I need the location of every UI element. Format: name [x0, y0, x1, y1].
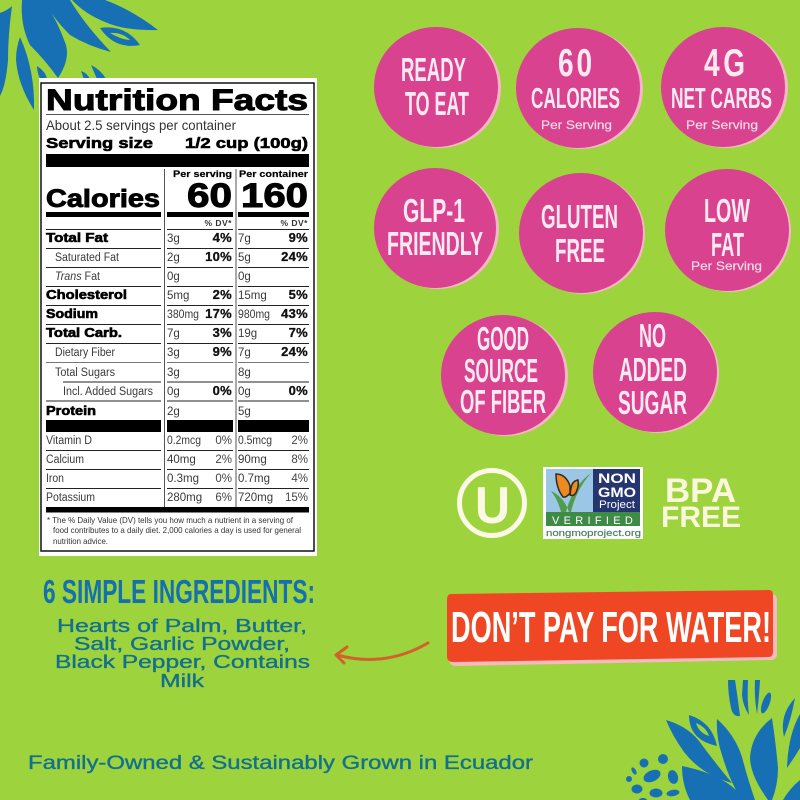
nutrient labels: Total Sugars [55, 367, 115, 379]
per serving column values [167, 230, 232, 504]
per serving column values: 0% [215, 473, 232, 485]
per container column values: 980mg [238, 309, 270, 321]
per serving column values: 0% [213, 383, 232, 398]
per container column values: 5% [289, 287, 308, 302]
per serving column values: 5mg [167, 290, 189, 302]
per serving column values: 3g [167, 347, 180, 359]
footer tagline: Family-Owned & Sustainably Grown in Ecuador [28, 753, 534, 774]
badge: no added sugar: SUGAR [618, 384, 687, 421]
heading: nutrition facts: Nutrition Facts [46, 84, 308, 117]
heading: ingredients: 6 SIMPLE INGREDIENTS: [43, 573, 315, 610]
badge: gluten free: FREE [555, 232, 605, 269]
arrow: banner to ingredients [336, 643, 428, 663]
per container column values: 15mg [238, 290, 267, 302]
calories section: Calories [46, 185, 160, 213]
per serving column values: 2% [213, 287, 232, 302]
icon: bpa free: BPA [665, 472, 736, 510]
nutrient labels: Total Fat [46, 231, 109, 245]
nutrient labels: Calcium [46, 454, 84, 466]
ingredients list [55, 616, 310, 691]
badge: gluten free [519, 173, 645, 294]
per container column values: 9% [289, 230, 308, 245]
nutrient labels: Incl. Added Sugars [63, 386, 153, 398]
per serving column values: 17% [205, 306, 232, 321]
nutrient labels: Cholesterol [46, 288, 127, 302]
per container column values: 24% [281, 344, 308, 359]
per container column values: 8g [238, 367, 251, 379]
footnote: food contributes to a daily diet. 2,000 calories a day is used for general [53, 525, 301, 535]
servings info [46, 114, 309, 167]
servings info: 1/2 cup (100g) [185, 135, 308, 152]
per container column values: 4% [291, 473, 308, 485]
icon: bpa free: FREE [661, 501, 741, 534]
badge: 4g net carbs: 4G [704, 42, 749, 85]
badge: good source of fiber [441, 315, 568, 436]
nutrient labels: Sodium [46, 307, 98, 321]
panel: nutrition facts label [39, 78, 317, 556]
per serving column values: 2g [167, 406, 180, 418]
per serving column values: 7g [167, 328, 180, 340]
footnote: nutrition advice. [53, 536, 108, 546]
per serving column values: 10% [205, 249, 232, 264]
leaf decoration: bottom right [626, 680, 800, 800]
nutrient labels: Saturated Fat [55, 252, 120, 264]
nutrient labels: Potassium [46, 492, 95, 504]
per serving column values: 0% [215, 435, 232, 447]
icon: bpa free [661, 472, 741, 534]
badge: no added sugar: NO [639, 317, 666, 354]
badge: no added sugar [593, 312, 719, 433]
nutrient labels: Total Carb. [46, 326, 122, 340]
icon: non-gmo project verified: Project [599, 499, 635, 511]
footnote: * The % Daily Value (DV) tells you how much a nutrient in a serving of [47, 515, 294, 525]
per serving column values: 9% [213, 344, 232, 359]
calories section: % DV* [280, 218, 308, 228]
calories section [46, 169, 309, 507]
per serving column values: 0g [167, 271, 180, 283]
badge: glp-1 friendly: FRIENDLY [387, 225, 483, 262]
nutrient labels: Vitamin D [46, 435, 92, 447]
badge: good source of fiber: SOURCE [464, 352, 538, 389]
icon: non-gmo project verified: GMO [598, 484, 636, 500]
calories section: Per container [239, 169, 308, 180]
per serving column values: 380mg [167, 309, 199, 321]
badge: ready to eat: READY [401, 51, 466, 88]
badge: glp-1 friendly: GLP-1 [403, 192, 465, 229]
per serving column values: 3% [213, 325, 232, 340]
per container column values: 15% [285, 492, 308, 504]
per serving column values: 280mg [167, 492, 202, 504]
per serving column values: 0g [167, 386, 180, 398]
per serving column values: 40mg [167, 454, 196, 466]
per serving column values: 3g [167, 233, 180, 245]
icon: orthodox union kosher mark: U [475, 477, 510, 535]
badge: 60 calories [516, 28, 643, 149]
ingredients list: Milk [160, 671, 205, 691]
butterfly [556, 474, 578, 497]
badge: ready to eat: TO EAT [405, 85, 469, 122]
servings info: About 2.5 servings per container [46, 117, 236, 133]
banner: don't pay for water [447, 590, 777, 666]
icon: non-gmo project verified: NON [598, 470, 636, 486]
per container column values: 0g [238, 386, 251, 398]
badge: 60 calories: 60 [558, 42, 595, 85]
ingredients list: Hearts of Palm, Butter, [57, 616, 307, 636]
calories section: 60 [187, 177, 232, 215]
leaf decoration: top left [0, 0, 158, 110]
per container column values [238, 230, 308, 504]
per serving column values: 2% [215, 454, 232, 466]
badge: glp-1 friendly [374, 168, 499, 289]
nutrient labels [46, 231, 153, 504]
per container column values: 7g [238, 233, 251, 245]
nutrient labels: Dietary Fiber [55, 347, 115, 359]
badge: 60 calories: Per Serving [541, 118, 612, 132]
nutrient labels: Iron [46, 473, 64, 485]
badge: 4g net carbs [661, 27, 788, 148]
per serving column values: 6% [215, 492, 232, 504]
per container column values: 19g [238, 328, 257, 340]
row dividers [46, 229, 309, 512]
grass blades [551, 473, 591, 512]
badge: good source of fiber: OF FIBER [460, 383, 546, 420]
icon: orthodox union kosher mark [460, 470, 524, 536]
calories section: % DV* [204, 218, 232, 228]
per container column values: 720mg [238, 492, 273, 504]
per serving column values: 2g [167, 252, 180, 264]
badge: low fat: FAT [711, 226, 744, 263]
nutrient labels: Protein [46, 404, 96, 418]
icon: non-gmo project verified [543, 467, 643, 539]
nutrient labels: Trans Fat [55, 271, 101, 283]
icon: non-gmo project verified: nongmoproject.org [546, 528, 641, 539]
per container column values: 5g [238, 406, 251, 418]
per container column values: 7g [238, 347, 251, 359]
badge: ready to eat [374, 27, 501, 148]
calories section: Per serving [173, 169, 232, 180]
per container column values: 0% [289, 383, 308, 398]
per container column values: 0.5mcg [238, 435, 272, 447]
badge: no added sugar: ADDED [619, 351, 687, 388]
per container column values: 8% [291, 454, 308, 466]
ingredients list: Salt, Garlic Powder, [74, 634, 290, 654]
per serving column values: 0.3mg [167, 473, 199, 485]
per container column values: 7% [289, 325, 308, 340]
ingredients list: Black Pepper, Contains [55, 652, 310, 672]
badge: 60 calories: CALORIES [531, 83, 620, 115]
badge: low fat: Per Serving [691, 259, 762, 273]
badge: low fat: LOW [704, 192, 751, 229]
per container column values: 0g [238, 271, 251, 283]
badge: low fat [665, 169, 791, 292]
per container column values: 24% [281, 249, 308, 264]
badge: good source of fiber: GOOD [477, 320, 529, 357]
per serving column values: 3g [167, 367, 180, 379]
badge: gluten free: GLUTEN [541, 198, 618, 235]
servings info: Serving size [46, 135, 153, 152]
per serving column values: 0.2mcg [167, 435, 201, 447]
footnote [47, 515, 301, 546]
per container column values: 43% [281, 306, 308, 321]
per container column values: 90mg [238, 454, 267, 466]
per container column values: 5g [238, 252, 251, 264]
per container column values: 0.7mg [238, 473, 270, 485]
badge: 4g net carbs: Per Serving [686, 118, 758, 132]
calories section: 160 [241, 177, 308, 215]
icon: non-gmo project verified: VERIFIED [552, 515, 637, 527]
per serving column values: 4% [213, 230, 232, 245]
per container column values: 2% [291, 435, 308, 447]
